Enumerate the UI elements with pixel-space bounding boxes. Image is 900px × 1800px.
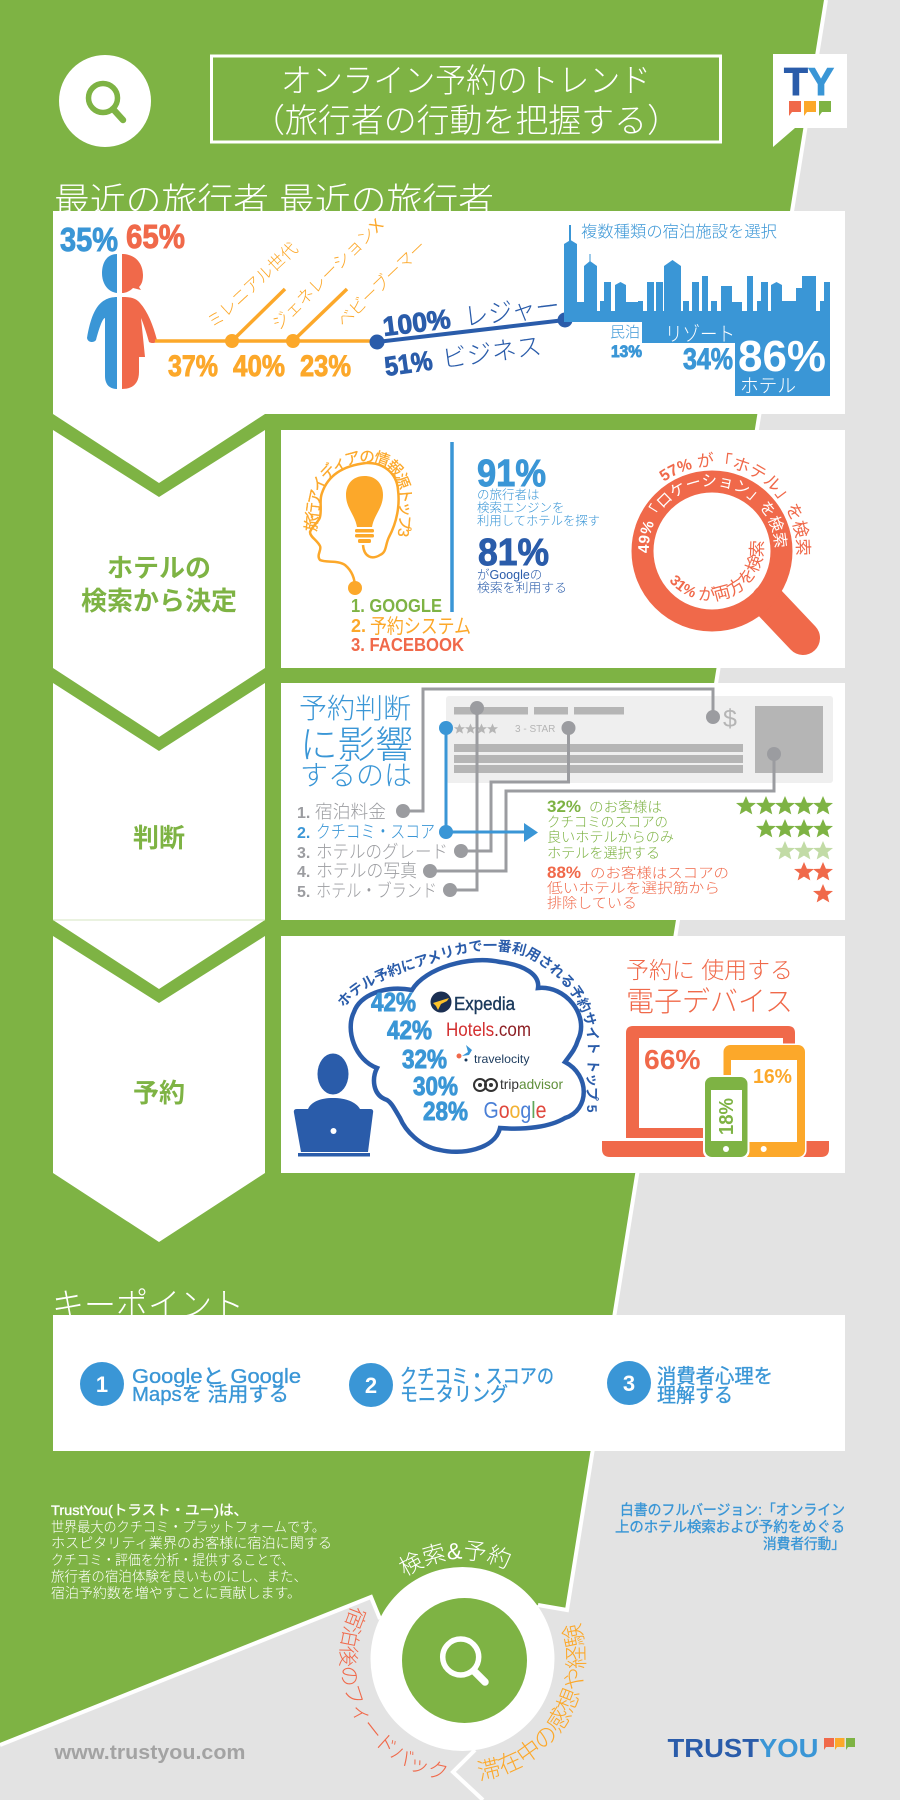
skyline chart: リゾート — [665, 323, 735, 346]
cycle diagram: 宿泊後のフィードバック — [339, 1608, 446, 1778]
text: about TrustYou — [51, 1502, 332, 1601]
generations timeline: ベビーブーマー — [334, 237, 430, 331]
ranked factor list: ホテルのグレード — [316, 842, 448, 862]
top sources list: 3. FACEBOOK — [351, 635, 464, 655]
heading: devices: 電子デバイス — [626, 986, 793, 1017]
cloud with top booking sites: 28% — [423, 1096, 468, 1126]
chart: magnifier with search stats: 49%「ロケーション」を検索 — [638, 474, 788, 553]
cloud with top booking sites: 42% — [387, 1015, 432, 1045]
title — [212, 56, 720, 142]
panel: hotel search stage: 検索から決定 — [81, 586, 237, 616]
panel: booking stage: 予約 — [133, 1078, 185, 1108]
logo: TY — [773, 54, 847, 147]
logo: travelocity: travelocity — [474, 1052, 530, 1066]
device chart: 66% — [644, 1044, 701, 1075]
hotel listing mockup: $ — [723, 705, 737, 733]
arrow: review score — [439, 721, 538, 842]
top sources list: 予約システム — [370, 615, 471, 638]
stat: 91 percent: 検索エンジンを — [477, 500, 565, 515]
key point 3: 消費者心理を — [657, 1365, 773, 1388]
key point 2 — [349, 1363, 554, 1407]
heading: key points: キーポイント — [52, 1287, 244, 1325]
hotel listing mockup — [446, 696, 833, 783]
icon: person with laptop — [294, 1054, 373, 1156]
device chart: 18% — [716, 1098, 738, 1135]
icon: header search — [59, 55, 151, 147]
title: オンライン予約のトレンド — [281, 62, 651, 99]
panel: hotel search stage: ホテルの — [107, 553, 211, 583]
panel: booking sites and devices — [281, 936, 845, 1173]
generations timeline: ジェネレーションX — [268, 215, 387, 334]
text: about TrustYou: 宿泊予約数を増やすことに貢献します。 — [51, 1585, 301, 1601]
gender split: 65% — [126, 218, 185, 255]
connector lines — [403, 689, 774, 890]
leisure and business line — [370, 290, 572, 382]
generations timeline: 40% — [233, 350, 285, 383]
review stat text: 88% — [547, 863, 581, 882]
key point 2: モニタリング — [400, 1383, 508, 1406]
review stat text: 排除している — [547, 895, 637, 911]
generations timeline: 37% — [168, 350, 218, 383]
cloud with top booking sites: ホテル予約にアメリカで一番利用される予約サイト トップ 5 — [338, 940, 600, 1112]
stat: 81 percent: 検索を利用する — [477, 580, 567, 595]
review stat text: のお客様はスコアの — [590, 865, 729, 881]
gender split — [60, 218, 185, 389]
logo: travelocity — [456, 1045, 530, 1066]
text: white paper — [615, 1502, 845, 1553]
panel: recent travelers — [53, 211, 845, 483]
skyline chart: 86% — [738, 332, 826, 381]
logo: Expedia — [430, 992, 516, 1014]
device chart — [602, 1026, 829, 1159]
key point 1: Googleと Google — [132, 1366, 301, 1388]
top sources list — [351, 596, 471, 655]
ranked factor list: 宿泊料金 — [315, 802, 386, 822]
leisure and business line: ビジネス — [440, 332, 543, 374]
heading: factors — [299, 693, 413, 791]
review stat text: 32% — [547, 797, 581, 816]
logo: Hotels.com: Hotels.com — [446, 1020, 531, 1041]
text: white paper: 白書のフルバージョン:「オンライン — [620, 1502, 845, 1519]
panel: booking stage — [53, 936, 265, 1242]
skyline chart — [564, 223, 830, 397]
stat: 91 percent: 91% — [477, 453, 546, 495]
website url: www.trustyou.com — [53, 1742, 245, 1764]
top sources list: 2. — [351, 616, 366, 636]
logo: TY: T — [784, 61, 808, 104]
icon: head with light bulb — [303, 450, 412, 595]
logo: Google: Google — [484, 1097, 546, 1123]
text: about TrustYou: 世界最大のクチコミ・プラットフォームです。 — [51, 1519, 325, 1535]
key point 2: クチコミ・スコアの — [400, 1365, 554, 1388]
stat: 91 percent — [477, 453, 600, 528]
key point 2: 2 — [365, 1373, 377, 1398]
stat: 81 percent: 81% — [478, 532, 549, 574]
title: （旅行者の行動を把握する） — [252, 102, 680, 139]
text: about TrustYou: クチコミ・評価を分析・提供することで、 — [51, 1552, 294, 1568]
review stat text: 低いホテルを選択筋から — [547, 880, 720, 896]
chart: magnifier with search stats: 31% が両方を検索 — [670, 541, 764, 602]
text: about TrustYou: ホスピタリティ業界のお客様に宿泊に関する — [51, 1535, 332, 1551]
review stat text: クチコミのスコアの — [547, 814, 668, 830]
heading: factors: するのは — [300, 760, 412, 791]
review stat text: 良いホテルからのみ — [547, 829, 674, 845]
panel: search sources — [281, 430, 845, 668]
ranked factor list: 1. — [297, 805, 310, 822]
logo: TY: Y — [808, 61, 834, 104]
icon: search — [443, 1639, 485, 1682]
key point 1: Mapsを 活用する — [132, 1383, 289, 1406]
text: white paper: 上のホテル検索および予約をめぐる — [615, 1519, 845, 1536]
ranked factor list: ホテルの写真 — [316, 861, 417, 881]
leisure and business line: 100% — [381, 304, 452, 342]
stat: 81 percent: がGoogleの — [477, 568, 542, 582]
chart: magnifier with search stats: 57% が「ホテル」を検索 — [659, 452, 812, 555]
ranked factor list: 3. — [297, 845, 310, 862]
ranked factor list: 2. — [297, 825, 310, 842]
star ratings — [736, 796, 833, 902]
ranked factor list — [297, 802, 448, 901]
skyline chart: 民泊 — [610, 324, 640, 341]
logo: tripadvisor: tripadvisor — [500, 1076, 563, 1092]
generations timeline — [155, 215, 430, 383]
chart: magnifier with search stats — [632, 452, 820, 655]
panel: decision stage — [53, 683, 265, 989]
leisure and business line: 51% — [383, 346, 434, 382]
gender split: 35% — [60, 221, 118, 258]
review stat text: のお客様は — [589, 799, 662, 815]
key point 1: 1 — [96, 1372, 108, 1397]
cloud with top booking sites: 30% — [413, 1071, 458, 1101]
cloud with top booking sites: 32% — [402, 1044, 447, 1074]
icon: head with light bulb: 旅行アイディアの情報源トップ3 — [303, 450, 412, 536]
generations timeline: 23% — [300, 350, 351, 383]
device chart: 16% — [753, 1066, 792, 1088]
heading: recent travelers: 最近の旅行者 最近の旅行者 — [54, 182, 494, 221]
text: white paper: 消費者行動」 — [763, 1536, 845, 1553]
review stat text — [547, 797, 729, 911]
heading: devices: 予約に 使用する — [626, 957, 793, 983]
logo: Expedia: Expedia — [454, 994, 516, 1014]
stat: 91 percent: の旅行者は — [477, 488, 540, 502]
generations timeline: ミレニアル世代 — [204, 239, 302, 332]
ranked factor list: クチコミ・スコア — [316, 822, 435, 842]
heading: factors: に影響 — [300, 725, 413, 767]
stat: 91 percent: 利用してホテルを探す — [477, 514, 600, 528]
key point 3 — [607, 1361, 773, 1407]
text: about TrustYou: 旅行者の宿泊体験を良いものにし、また、 — [51, 1568, 307, 1584]
cycle diagram: 滞在中の感想や経験 — [477, 1623, 586, 1782]
ranked factor list: 4. — [297, 864, 310, 881]
panel: key points — [53, 1315, 845, 1451]
skyline chart: ホテル — [740, 376, 796, 397]
heading: factors: 予約判断 — [299, 693, 411, 724]
top sources list: 1. GOOGLE — [351, 596, 442, 616]
text: about TrustYou: TrustYou(トラスト・ユー)は、 — [51, 1502, 248, 1518]
key point 3: 3 — [623, 1371, 635, 1396]
key point 1 — [80, 1362, 301, 1406]
heading: devices — [626, 957, 793, 1017]
cycle diagram: 検索&予約 — [399, 1540, 511, 1576]
logo: TrustYou: TRUSTYOU — [668, 1733, 818, 1763]
cycle diagram — [339, 1540, 586, 1782]
skyline chart: 34% — [683, 343, 733, 376]
stat: 81 percent — [477, 532, 567, 595]
panel: decision stage: 判断 — [133, 823, 185, 853]
ranked factor list: 5. — [297, 884, 310, 901]
ranked factor list: ホテル・ブランド — [316, 881, 437, 901]
key point 3: 理解する — [657, 1384, 733, 1407]
review stat text: ホテルを選択する — [547, 845, 660, 861]
cloud with top booking sites: 42% — [371, 987, 416, 1017]
skyline chart: 13% — [611, 342, 642, 361]
skyline chart: 複数種類の宿泊施設を選択 — [581, 223, 777, 241]
panel: hotel search stage — [53, 430, 265, 737]
hotel listing mockup: 3 - STAR — [515, 724, 555, 735]
leisure and business line: レジャー — [462, 290, 561, 332]
panel: decision factors — [281, 683, 845, 920]
